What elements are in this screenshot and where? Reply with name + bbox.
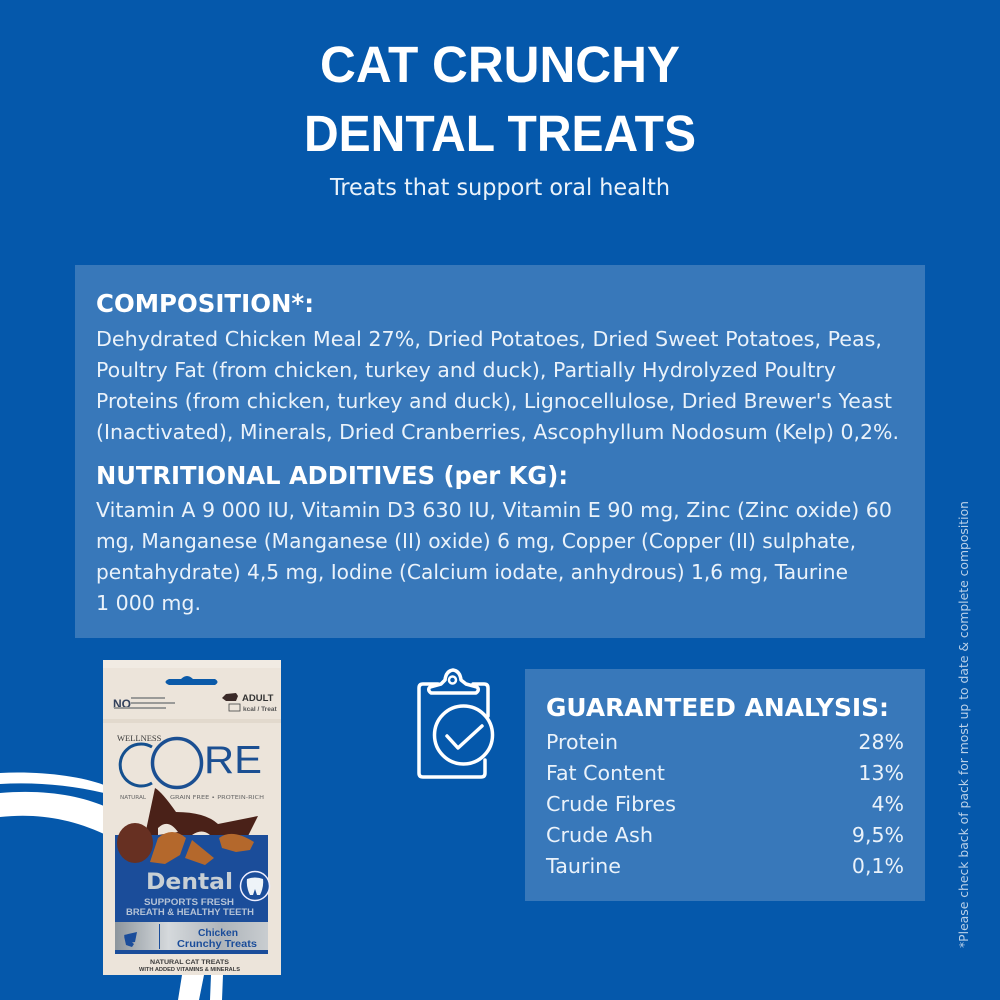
wellness core logo: RE [204,739,262,782]
blue dental panel [115,835,268,954]
row: taurine: Taurine [545,854,621,878]
row: crude fibres [546,792,904,816]
text block: nutritional additives [96,498,892,615]
row: fat content: 13% [858,761,904,785]
hang hole [166,676,218,685]
tagline [120,795,264,801]
wellness core logo: WELLNESS [117,733,162,743]
heading: composition: COMPOSITION*: [96,289,314,318]
text block: nutritional additives: 1 000 mg. [96,591,201,615]
row: protein: 28% [858,730,904,754]
text block: composition: Proteins (from chicken, turkey and duck), Lignocellulose, Dried Brewer's Yeast [96,389,892,413]
text block: composition: Poultry Fat (from chicken, turkey and duck), Partially Hydrolyzed Poultry [96,358,836,382]
supports text: SUPPORTS FRESH [144,897,234,908]
footnote: *Please check back of pack for most up to date & complete composition [957,501,971,948]
row: fat content: Fat Content [546,761,665,785]
dental label: Dental [146,870,233,895]
title: DENTAL TREATS [304,105,696,162]
text block: nutritional additives: pentahydrate) 4,5 mg, Iodine (Calcium iodate, anhydrous) 1,6 mg, Taurine [96,560,848,584]
icon: clipboard with check [419,670,492,777]
product package [103,660,281,975]
natural cat treats text: NATURAL CAT TREATS [150,959,230,966]
row: taurine [545,854,904,878]
chocolate egg shape [117,823,153,863]
text block: composition [96,327,899,444]
text block: nutritional additives: mg, Manganese (Manganese (II) oxide) 6 mg, Copper (Copper (II) sulphate, [96,529,856,553]
heading: guaranteed analysis: GUARANTEED ANALYSIS: [546,693,889,722]
row: protein [546,730,904,754]
natural cat treats text [139,959,241,973]
product package: ADULT [242,693,274,704]
subtitle: Treats that support oral health [329,175,670,201]
decorative white swoosh stripes [0,773,223,1000]
adult label [222,693,238,701]
no-additives label: NO [113,697,131,711]
wellness core logo [117,733,262,788]
heading: nutritional additives: NUTRITIONAL ADDITIVES (per KG): [96,461,568,490]
kibble pieces [150,832,254,865]
natural cat treats text: WITH ADDED VITAMINS & MINERALS [139,967,241,973]
tooth icon [240,872,270,900]
supports text: BREATH & HEALTHY TEETH [126,907,254,918]
cat illustration [145,788,258,840]
text block: composition: Dehydrated Chicken Meal 27%, Dried Potatoes, Dried Sweet Potatoes, Peas, [96,327,882,351]
title [304,36,696,162]
row: crude fibres: Crude Fibres [546,792,676,816]
text block: nutritional additives: Vitamin A 9 000 IU, Vitamin D3 630 IU, Vitamin E 90 mg, Zinc (Zinc oxide) 60 [96,498,892,522]
silver label: Chicken [198,928,238,939]
row: taurine: 0,1% [852,854,904,878]
title: CAT CRUNCHY [320,36,680,93]
row: crude ash [546,823,904,847]
silver label [115,922,268,950]
pouch [103,660,281,975]
row: crude ash: Crude Ash [546,823,653,847]
tagline: GRAIN FREE • PROTEIN-RICH [170,795,264,801]
panel: guaranteed analysis [525,669,925,901]
silver label: Crunchy Treats [177,939,257,950]
tagline: NATURAL [120,795,146,801]
row: protein: Protein [546,730,618,754]
supports text [126,897,254,918]
row: crude ash: 9,5% [852,823,904,847]
row: crude fibres: 4% [871,792,904,816]
product package: kcal / Treat [243,706,277,713]
panel: composition and additives [75,265,925,638]
text block: composition: (Inactivated), Minerals, Dried Cranberries, Ascophyllum Nodosum (Kelp) 0,2%. [96,420,899,444]
eyes [158,824,210,835]
row: fat content [546,761,904,785]
